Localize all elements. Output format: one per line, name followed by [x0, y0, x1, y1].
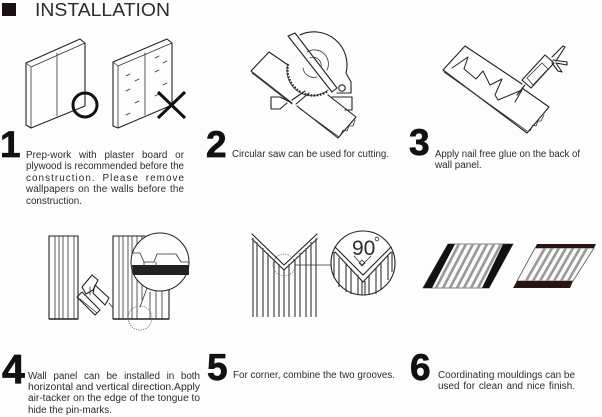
step 1 text: Prep-work with plaster board or — [26, 150, 185, 161]
step 3 text — [434, 149, 580, 171]
step number 1: 1 — [0, 124, 21, 165]
step 4 text: hide the pin-marks. — [28, 405, 112, 416]
step 1 text: construction. Please remove — [26, 173, 184, 184]
illustration: vertical end mouldings — [423, 244, 513, 288]
step number 6: 6 — [410, 347, 431, 388]
90 degree label: 90 — [352, 237, 375, 260]
illustration: air-tacker on wall panel — [49, 233, 189, 330]
illustration: correct plaster board wall — [26, 39, 97, 128]
illustration: circular saw cutting panel — [251, 32, 356, 138]
title: INSTALLATION — [35, 0, 170, 20]
step 1 text: plywood is recommended before the — [26, 161, 185, 172]
step 1 text — [25, 150, 185, 207]
step 3 text: Apply nail free glue on the back of — [435, 149, 580, 160]
step 4 text — [28, 371, 201, 416]
illustration: incorrect wallpapered wall — [113, 39, 185, 128]
header — [2, 0, 170, 20]
step number 5: 5 — [207, 347, 228, 388]
panel: step 3 — [409, 46, 580, 171]
step 1 text: construction. — [26, 196, 82, 207]
illustration: horizontal end mouldings — [513, 244, 596, 288]
panel: step 6 — [410, 244, 596, 392]
step 1 text: wallpapers on the walls before the — [25, 184, 184, 195]
step 6 text — [438, 370, 575, 392]
step 4 text: Wall panel can be installed in both — [28, 371, 200, 382]
step 4 text: air-tacker on the edge of the tongue to — [28, 393, 201, 404]
illustration: corner of two grooved panels — [252, 234, 332, 317]
step number 2: 2 — [206, 124, 227, 165]
illustration: glue gun on panel back — [443, 46, 567, 133]
step number 3: 3 — [409, 122, 430, 163]
step 3 text: wall panel. — [434, 160, 482, 171]
panel: step 1 — [0, 39, 185, 207]
header square icon — [2, 3, 16, 16]
step 4 text: horizontal and vertical direction.Apply — [28, 382, 200, 393]
tacker tool — [77, 275, 113, 315]
step 5 text: For corner, combine the two grooves. — [233, 370, 395, 381]
panel: step 5 — [207, 231, 395, 388]
magnified tongue detail — [131, 233, 189, 291]
step 2 text: Circular saw can be used for cutting. — [232, 149, 389, 160]
step number 4: 4 — [2, 346, 25, 392]
step 6 text: Coordinating mouldings can be — [438, 370, 575, 381]
step 6 text: used for clean and nice finish. — [438, 381, 575, 392]
panel: step 2 — [206, 32, 389, 165]
magnified 90 degree detail — [331, 231, 395, 295]
panel: step 4 — [2, 233, 201, 416]
